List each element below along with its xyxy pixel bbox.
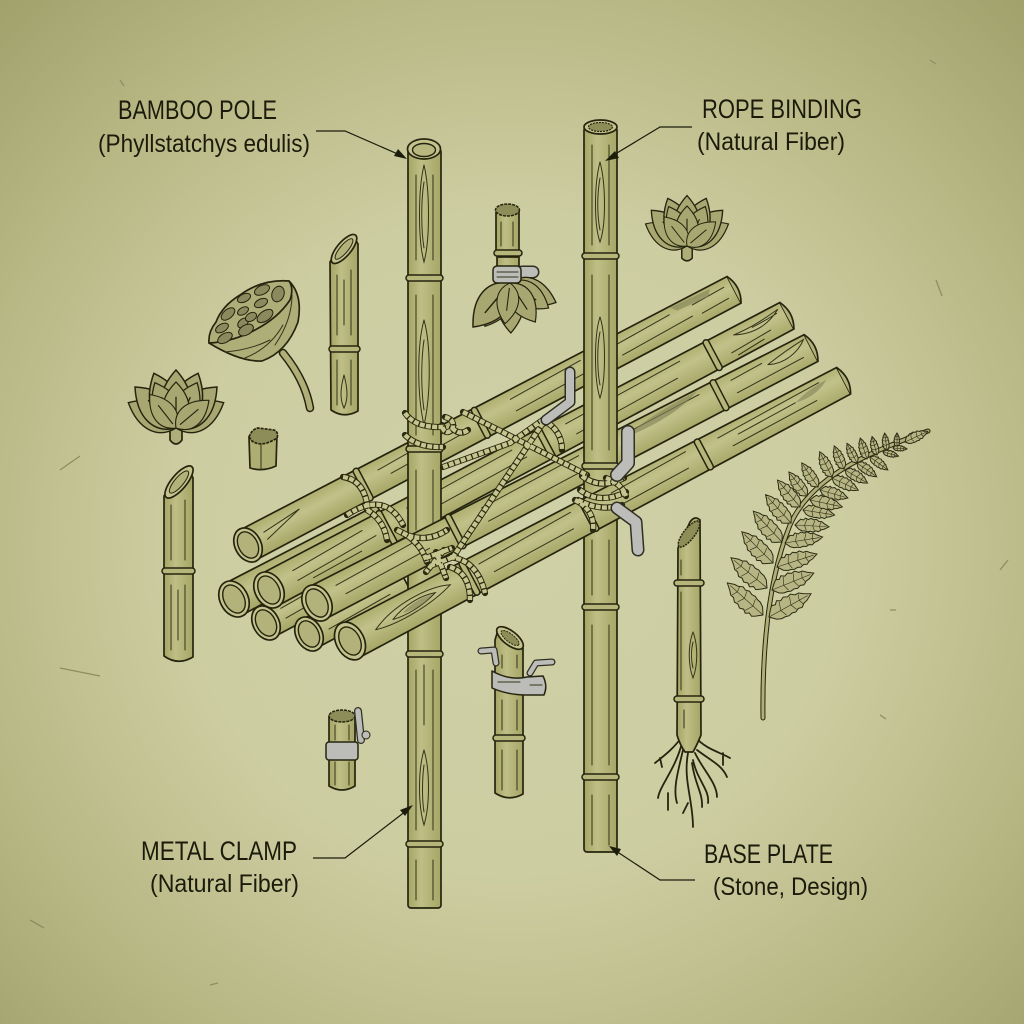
horizontal pole bundle: rear poles (213, 272, 799, 656)
arrow: rope binding leader (605, 127, 692, 161)
label: metal clamp (141, 836, 299, 898)
label: bamboo pole: BAMBOO POLE (118, 95, 277, 125)
label: bamboo pole (98, 95, 310, 158)
rope binding (343, 412, 626, 600)
arrow: bamboo pole leader (316, 131, 407, 159)
pole E (296, 329, 823, 626)
label: metal clamp: (Natural Fiber) (150, 870, 299, 898)
metal clamps on frame (546, 372, 638, 550)
icon: lotus flower top right (640, 193, 734, 261)
small bamboo cube (249, 428, 278, 470)
rear pole stub D (246, 555, 372, 645)
bamboo piece with clamp and hanging lotus (461, 204, 561, 337)
small bamboo piece with metal clamp (326, 710, 370, 790)
icon: fern frond (720, 426, 930, 718)
arrow: metal clamp leader (313, 805, 413, 858)
arrow: base plate leader (609, 846, 695, 880)
rear pole stub F (289, 566, 415, 656)
bamboo piece with metal clamp, centre bottom (481, 623, 552, 798)
pole A (228, 272, 746, 567)
bamboo pole 2 (582, 120, 619, 852)
label: bamboo pole: (Phyllstatchys edulis) (98, 130, 310, 158)
label: rope binding (697, 94, 862, 156)
bamboo cut piece with slanted top, far left (160, 462, 198, 661)
icon: lotus seed pod (209, 281, 310, 408)
label: metal clamp: METAL CLAMP (141, 836, 297, 866)
roots (655, 737, 730, 827)
pole G (328, 361, 856, 665)
pole C (248, 297, 799, 613)
bamboo shoot with roots (655, 518, 730, 827)
rear pole stub B (213, 502, 393, 622)
label: base plate: BASE PLATE (704, 839, 833, 869)
icon: lotus flower left (122, 367, 230, 444)
bamboo pole 1 (406, 139, 443, 908)
label: rope binding: (Natural Fiber) (697, 128, 845, 156)
label: base plate: (Stone, Design) (713, 873, 868, 901)
label: rope binding: ROPE BINDING (702, 94, 862, 124)
label: base plate (704, 839, 868, 901)
bamboo cut piece with slanted top, centre-left (327, 231, 361, 415)
